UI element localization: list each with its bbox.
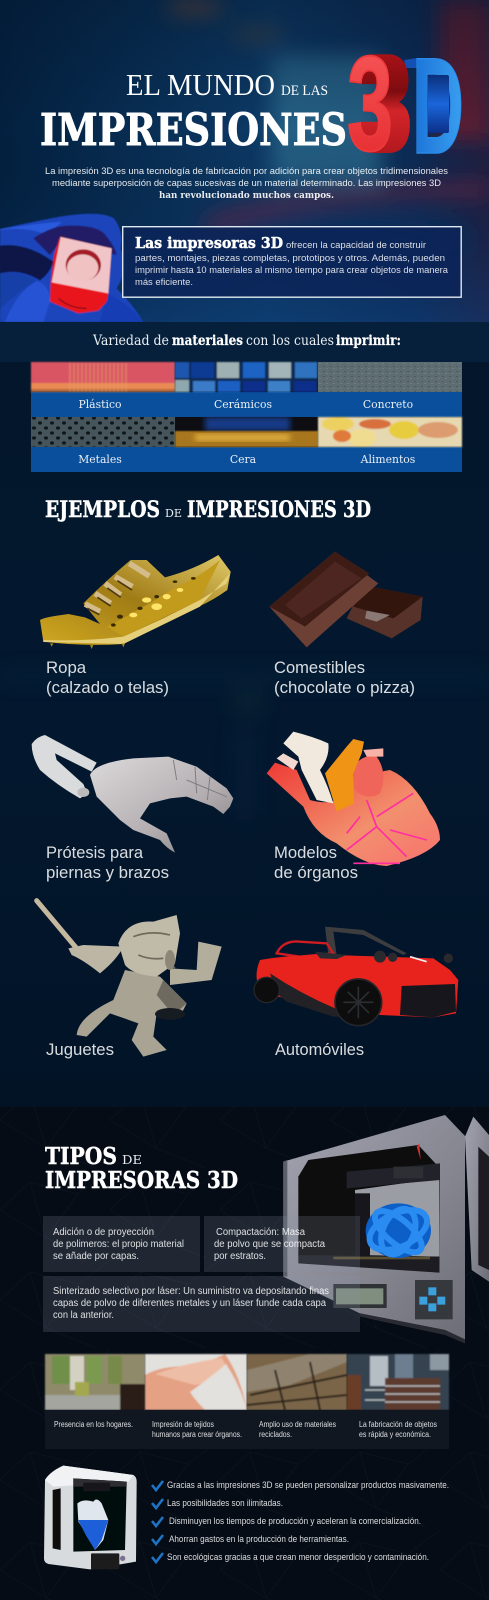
card: hogares: Presencia en los hogares. [54,1420,133,1429]
box: adición [43,1216,200,1272]
card: reciclados: Amplio uso de materiales [259,1420,336,1429]
callout: las impresoras 3D: más eficiente. [135,277,193,288]
heading: ejemplos: EJEMPLOS [45,497,160,523]
hero background [0,0,489,322]
card: reciclados [247,1354,347,1449]
label: Comestibles [274,658,365,677]
card: hogares [45,1354,145,1449]
icon: small white 3D printer [44,1466,137,1569]
label: ceramics: Cerámicos [214,398,272,411]
box: compactación: por estratos. [214,1251,266,1262]
heading: tipos de impresoras: DE [122,1152,142,1167]
icon: large 3D printer [283,1115,489,1343]
intro text: han revolucionado muchos campos. [159,190,334,201]
materials heading: imprimir: [336,333,401,349]
label: wax: Cera [230,453,257,466]
material: food [318,417,462,447]
check item 2: Las posibilidades son ilimitadas. [167,1498,283,1508]
card: económica: La fabricación de objetos [359,1420,437,1429]
callout: las impresoras 3D: ofrecen la capacidad de construir [286,240,427,251]
box: adición: de polimeros: el propio material [53,1239,184,1250]
label: metals: Metales [78,453,122,466]
panel: type boxes [43,1216,360,1332]
box: sinterizado [43,1276,360,1332]
card: reciclados: reciclados. [259,1430,292,1439]
icon: chocolate bars [269,552,423,647]
label: piernas y brazos [46,863,169,882]
callout: las impresoras 3D [123,227,461,297]
label: Juguetes [46,1040,114,1059]
label: Automóviles [275,1040,364,1059]
icon: 3D logo: 3 [350,28,396,179]
material: metals [31,417,175,447]
label [274,658,415,697]
icon: heart model [267,732,440,866]
panel: benefit photos [45,1354,449,1449]
icon: 3D logo: 3 [347,28,393,179]
callout: las impresoras 3D: Las impresoras 3D [135,234,283,252]
title: DE LAS [281,83,328,99]
panel: materials grid [31,362,462,472]
heading: ejemplos: DE [165,507,182,520]
material: ceramics [175,362,318,392]
intro text: mediante superposición de capas sucesivas de un material determinado. Las impresiones 3D [52,178,441,189]
card: económica [347,1354,449,1449]
card: económica: es rápida y económica. [359,1430,431,1439]
label: Prótesis para [46,843,144,862]
example: heart [267,732,440,882]
label: concrete: Concreto [363,398,413,411]
label: (chocolate o pizza) [274,678,415,697]
materials heading: materiales [172,333,243,349]
label [46,658,169,697]
example: chocolate [269,552,423,697]
heading: ejemplos [45,497,371,523]
material: plastic [31,362,175,392]
heading: tipos de impresoras: TIPOS [45,1143,117,1170]
material: concrete [318,362,462,392]
example: car [254,927,458,1059]
box: sinterizado: capas de polvo de diferentes metales y un láser funde cada capa [53,1298,326,1309]
box: adición: Adición o de proyección [53,1227,154,1238]
intro text: La impresión 3D es una tecnología de fabricación por adición para crear objetos tridimensionales [45,166,448,177]
box: sinterizado: Sinterizado selectivo por láser: Un suministro va depositando finas [53,1286,329,1297]
title: EL MUNDO [126,67,275,102]
heading: tipos de impresoras [45,1143,238,1194]
icon: prosthetic hand [32,735,233,853]
icon: 3D logo: 3 [362,28,408,179]
heading: ejemplos: IMPRESIONES 3D [187,497,371,523]
icon: Yoda figurine [37,901,222,1057]
check item 3: Disminuyen los tiempos de producción y aceleran la comercialización. [169,1516,421,1526]
label: food: Alimentos [360,453,415,466]
materials heading [0,322,489,362]
check item 5: Son ecológicas gracias a que crean menor desperdicio y contaminación. [167,1552,429,1562]
faint background blur [0,670,489,820]
check item 4: Ahorran gastos en la producción de herramientas. [169,1534,349,1544]
heading: tipos de impresoras: IMPRESORAS 3D [45,1167,238,1194]
check item 1: Gracias a las impresiones 3D se pueden personalizar productos masivamente. [167,1480,449,1490]
label: de órganos [274,863,358,882]
label: (calzado o telas) [46,678,169,697]
label: Modelos [274,843,337,862]
label: plastic: Plástico [78,398,122,411]
box: sinterizado: con la anterior. [53,1310,114,1321]
section background: tipos [0,1107,489,1600]
intro text [45,166,448,201]
title: IMPRESIONES [40,105,347,156]
checklist [152,1480,449,1562]
example: toy [37,901,222,1059]
icon: red printed car [254,927,458,1026]
callout: las impresoras 3D: partes, montajes, piezas completas, prototipos y otros. Además, pueden [135,253,445,264]
icon: 3D logo: 3 [366,28,412,179]
icon: hand holding printed cube [0,214,143,322]
example: prosthesis [32,735,233,882]
label: Ropa [46,658,87,677]
card: tejidos: humanos para crear órganos. [152,1430,242,1439]
box: compactación: Compactación: Masa [216,1227,305,1238]
callout: las impresoras 3D: imprimir hasta 10 materiales al mismo tiempo para crear objetos de manera [135,265,449,276]
card: tejidos: Impresión de tejidos [152,1420,214,1429]
card: tejidos [145,1354,247,1449]
box: compactación: de polvo que se compacta [214,1239,325,1250]
materials heading: Variedad de [92,333,169,349]
material: wax [175,417,318,447]
icon: 3D logo [347,28,464,183]
box: adición: se añade por capas. [53,1251,139,1262]
icon: 3D logo: 3 [358,28,404,179]
middle background [0,322,489,1107]
example: shoe [40,555,231,697]
icon: golden shoe [40,555,231,649]
label [46,843,169,882]
label [274,843,358,882]
icon: 3D logo: 3 [354,28,400,179]
materials heading: con los cuales [246,333,334,349]
title [40,67,347,156]
box: compactación [204,1216,360,1272]
